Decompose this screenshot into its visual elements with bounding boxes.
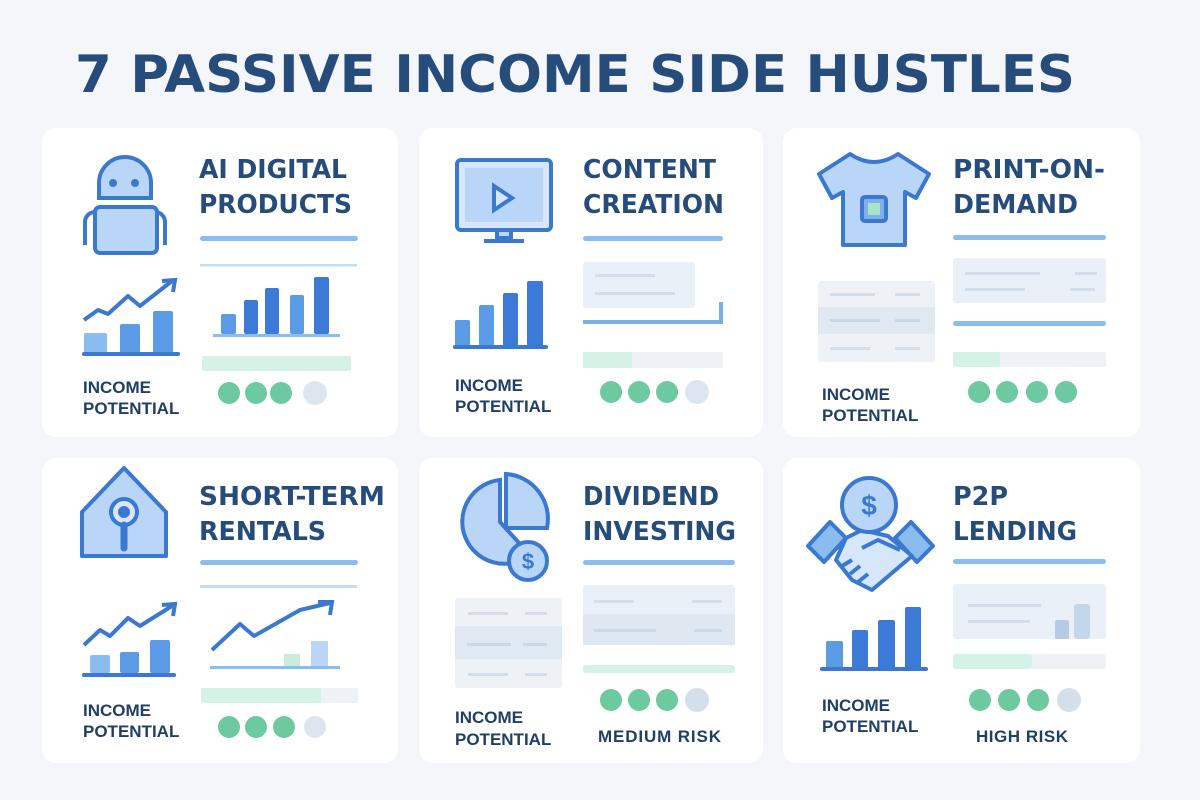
rating dots: [600, 688, 709, 712]
table: [818, 281, 935, 362]
panel title: PRINT-ON-: [953, 155, 1105, 185]
panel: content creation: POTENTIAL: [455, 397, 551, 416]
rating dots: [968, 381, 1077, 403]
chart: right growth: [210, 602, 340, 669]
icon: pie chart with coin: [462, 474, 548, 580]
panel: AI digital products: PRODUCTS: [199, 190, 352, 220]
title: 7 PASSIVE INCOME SIDE HUSTLES: [75, 45, 1075, 105]
chart: left growth: [82, 280, 180, 356]
chart: right bars: [213, 277, 340, 337]
panel title: DIVIDEND: [583, 482, 719, 512]
icon: pie chart with coin: $: [522, 549, 534, 574]
panel: P2P lending: [783, 458, 1140, 763]
panel: print-on-demand: DEMAND: [953, 190, 1078, 220]
panel: dividend investing: INVESTING: [583, 517, 736, 547]
icon: handshake with coin: $: [861, 490, 877, 521]
label: INCOME: [822, 385, 890, 404]
panel: print-on-demand: [783, 128, 1140, 437]
panel: short-term rentals: [42, 458, 398, 763]
panel title: P2P: [953, 482, 1008, 512]
rating dots: [969, 688, 1081, 712]
panel: AI digital products: POTENTIAL: [83, 399, 179, 418]
icon: robot: [85, 157, 165, 253]
panel: dividend investing: [419, 458, 763, 763]
chart: bars: [820, 607, 928, 671]
panel title: SHORT-TERM: [199, 482, 385, 512]
chart: left growth: [82, 604, 176, 677]
panel: content creation: [419, 128, 763, 437]
rating dots: [600, 380, 709, 404]
icon: monitor: [457, 160, 551, 241]
panel: content creation: CREATION: [583, 190, 724, 220]
panel: dividend investing: POTENTIAL: [455, 730, 551, 749]
rating dots: [218, 716, 326, 738]
panel: print-on-demand: POTENTIAL: [822, 406, 918, 425]
icon: t-shirt: [819, 154, 929, 245]
label: INCOME: [455, 708, 523, 727]
risk label: MEDIUM RISK: [598, 727, 722, 746]
label: INCOME: [83, 701, 151, 720]
panel: P2P lending: POTENTIAL: [822, 717, 918, 736]
panel: short-term rentals: POTENTIAL: [83, 722, 179, 741]
chart: bars: [453, 281, 548, 349]
panel: AI digital products: [42, 128, 398, 437]
panel: P2P lending: LENDING: [953, 517, 1077, 547]
table: [455, 598, 562, 688]
label: INCOME: [822, 696, 890, 715]
icon: house with key: [82, 468, 166, 556]
panel: short-term rentals: RENTALS: [199, 517, 326, 547]
icon: handshake with coin: [808, 478, 933, 590]
label: INCOME: [83, 378, 151, 397]
risk label: HIGH RISK: [976, 727, 1069, 746]
panel title: AI DIGITAL: [199, 155, 347, 185]
panel title: CONTENT: [583, 155, 716, 185]
rating dots: [218, 381, 327, 405]
label: INCOME: [455, 376, 523, 395]
